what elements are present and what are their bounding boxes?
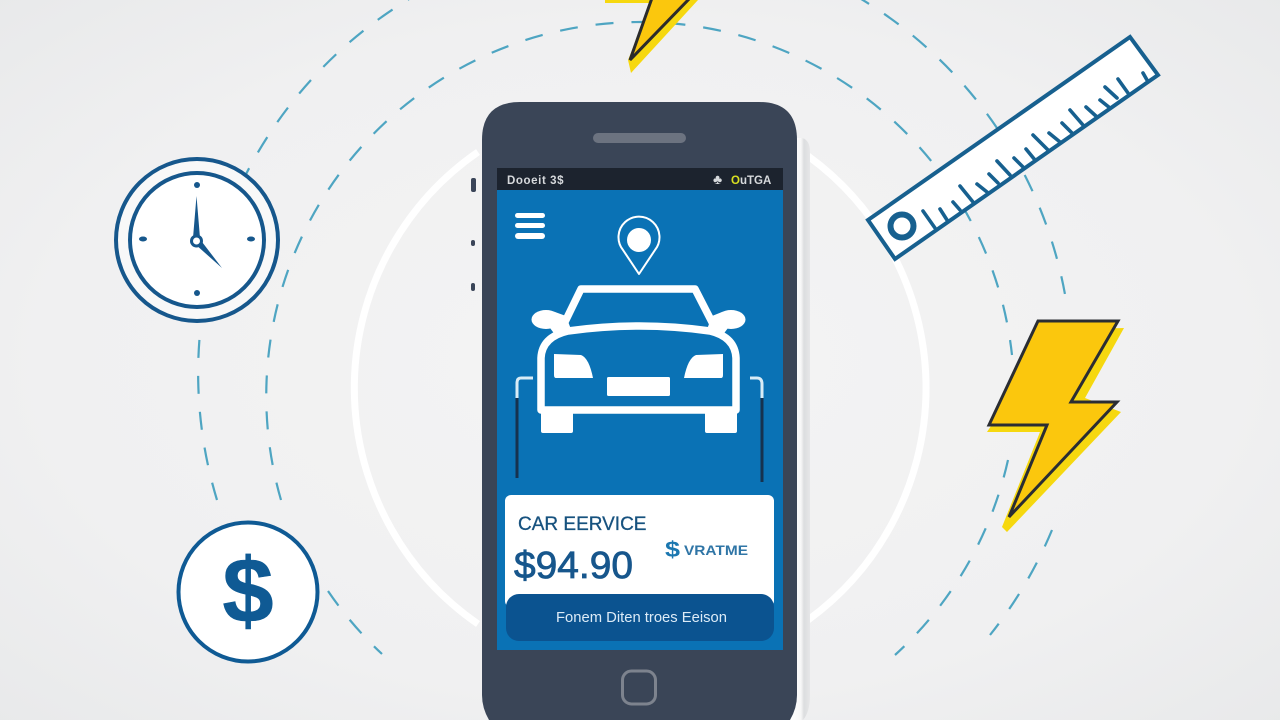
status bar: uTGA <box>740 175 771 187</box>
price card: CAR EERVICE <box>518 514 646 535</box>
location pin <box>618 217 660 274</box>
icon: clock <box>116 159 278 321</box>
action button: Fonem Diten troes Eeison <box>556 610 727 626</box>
status bar: Dooeit 3$ <box>507 175 564 187</box>
menu icon <box>515 213 545 239</box>
status bar: ♣ <box>713 171 722 187</box>
price card: VRATME <box>684 542 748 558</box>
phone side buttons <box>471 178 476 291</box>
home button <box>622 671 656 704</box>
dashed orbit: outer <box>198 0 1066 635</box>
white ring behind phone <box>354 152 926 624</box>
screen <box>497 188 783 650</box>
phone <box>482 102 797 720</box>
icon: top lightning bolt <box>605 0 698 73</box>
icon: ruler <box>868 37 1158 259</box>
phone body <box>482 102 797 720</box>
dashed orbit: inner <box>266 22 1012 655</box>
phone shadow <box>790 138 810 720</box>
price card: $ <box>665 537 680 562</box>
price card <box>505 495 774 607</box>
speaker <box>593 133 686 143</box>
icon: large lightning bolt <box>987 321 1124 532</box>
status bar <box>497 168 783 190</box>
price card: $94.90 <box>514 545 633 587</box>
car icon <box>532 289 746 433</box>
action button <box>506 594 774 641</box>
icon: dollar coin <box>178 522 318 662</box>
icon: dollar coin: $ <box>222 540 274 642</box>
status bar: O <box>731 175 740 187</box>
lift brackets <box>517 378 762 482</box>
